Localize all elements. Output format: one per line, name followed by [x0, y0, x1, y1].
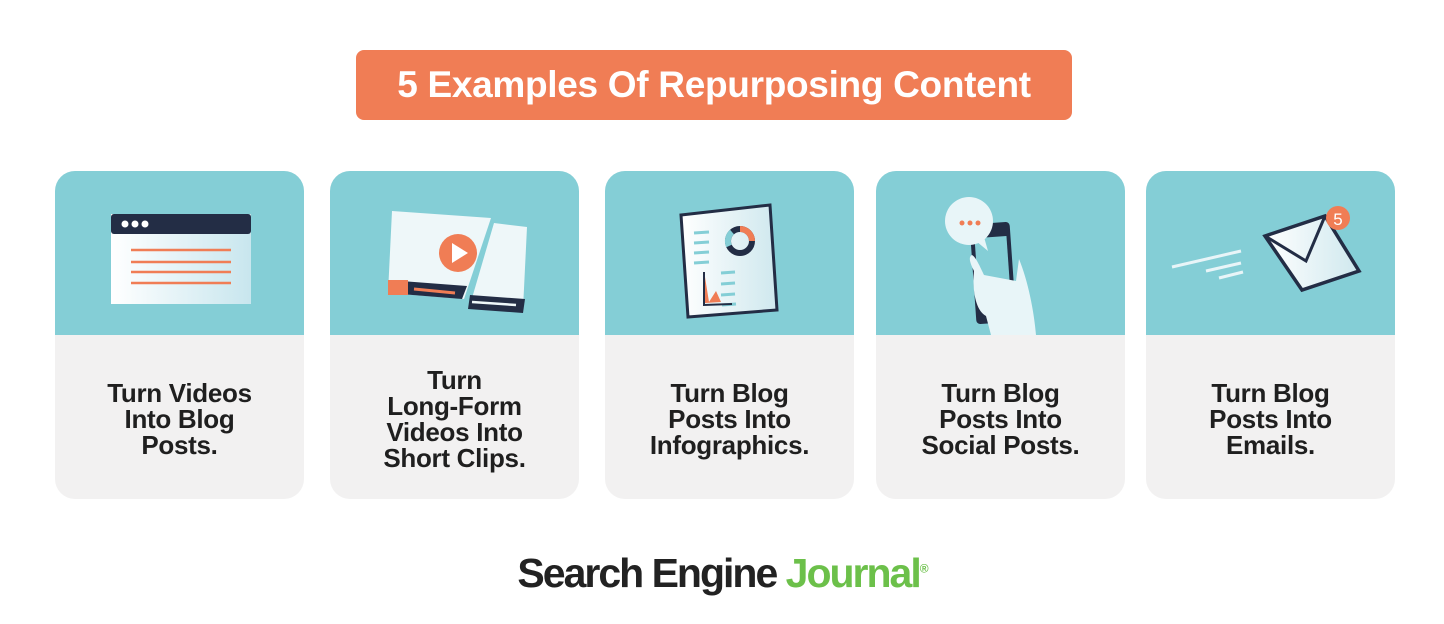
title: 5 Examples Of Repurposing Content [397, 64, 1031, 105]
label [1209, 378, 1332, 460]
label [383, 365, 526, 473]
panel: blog to infographics [605, 171, 854, 499]
panel: blog to emails [1146, 171, 1395, 499]
label [650, 378, 809, 460]
label: Videos Into [386, 417, 523, 447]
icon: envelope: 5 [1333, 210, 1343, 229]
label: Turn Blog [941, 378, 1060, 408]
label: Short Clips. [383, 443, 526, 473]
label: Turn [427, 365, 482, 395]
label: Posts Into [939, 404, 1062, 434]
label: Turn Blog [670, 378, 789, 408]
label: Posts Into [668, 404, 791, 434]
label: Into Blog [125, 404, 234, 434]
label: Social Posts. [922, 430, 1079, 460]
icon: envelope [1146, 171, 1395, 335]
label: Turn Blog [1211, 378, 1330, 408]
label [922, 378, 1079, 460]
icon: phone in hand [876, 171, 1125, 335]
label: Posts Into [1209, 404, 1332, 434]
label: Posts. [141, 430, 218, 460]
icon: video clips [330, 171, 579, 335]
panel: long-form to clips [330, 171, 579, 499]
logo: Search Engine Journal® [517, 550, 927, 596]
label [107, 378, 252, 460]
title [356, 50, 1072, 120]
icon: infographic page [605, 171, 854, 335]
icon: browser window [55, 171, 304, 335]
label: Emails. [1226, 430, 1315, 460]
panel: blog to social [876, 171, 1125, 499]
label: Long-Form [387, 391, 522, 421]
label: Turn Videos [107, 378, 252, 408]
label: Infographics. [650, 430, 809, 460]
panel: videos to blog posts [55, 171, 304, 499]
